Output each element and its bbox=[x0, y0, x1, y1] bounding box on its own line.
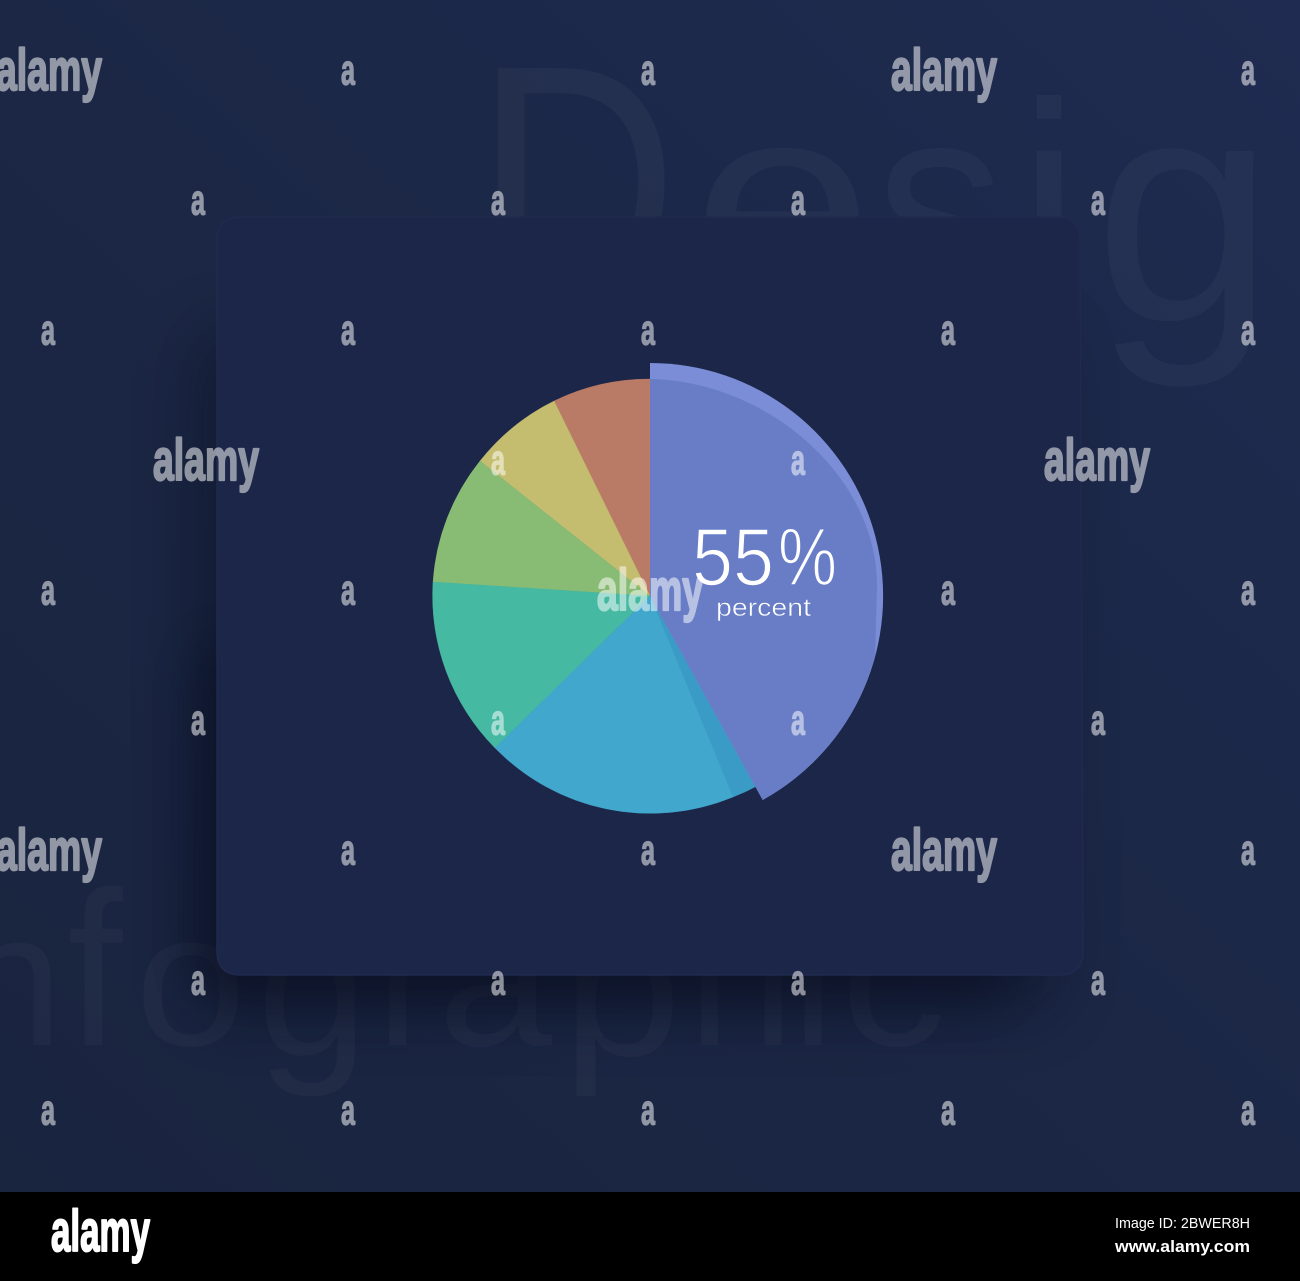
background word: Infographic: g bbox=[257, 875, 368, 1098]
watermark: repeated letter a: a bbox=[641, 46, 656, 94]
watermark: repeated letter a: a bbox=[341, 46, 356, 94]
watermark: repeated letter a: a bbox=[491, 436, 506, 484]
background word: Design: i bbox=[1018, 44, 1080, 360]
value: 55%: % bbox=[778, 512, 837, 603]
watermark: repeated letter a: a bbox=[1091, 696, 1106, 744]
watermark: repeated letter a: a bbox=[791, 696, 806, 744]
watermark: repeated letter a: a bbox=[1241, 566, 1256, 614]
background word: Infographic: o bbox=[135, 874, 246, 1086]
watermark: repeated letter a: a bbox=[41, 306, 56, 354]
watermark: repeated letter a: a bbox=[41, 1086, 56, 1134]
background word: Design: e bbox=[692, 44, 874, 360]
background word: Infographic: h bbox=[688, 859, 794, 1089]
watermark: repeated letter a: a bbox=[41, 566, 56, 614]
footer bar bbox=[0, 1192, 1300, 1281]
background word: Infographic: a bbox=[438, 873, 552, 1085]
background word: Design: s bbox=[875, 44, 1005, 360]
card shadow: lower part bbox=[222, 620, 1022, 970]
watermark: repeated letter a: a bbox=[941, 566, 956, 614]
label: percent: percent bbox=[716, 594, 811, 622]
slice: blue shadow strip bbox=[650, 596, 757, 797]
watermark: repeated letter a: a bbox=[191, 176, 206, 224]
watermark: repeated letter a: a bbox=[491, 696, 506, 744]
watermark: alamy words: alamy bbox=[891, 38, 997, 103]
background word: Infographic: c bbox=[841, 874, 946, 1086]
watermark: repeated letter a: a bbox=[491, 956, 506, 1004]
watermark: repeated letter a: a bbox=[791, 176, 806, 224]
watermark: repeated letter a: a bbox=[341, 826, 356, 874]
background word: Infographic: f bbox=[67, 846, 123, 1092]
watermark: repeated letter a: a bbox=[1241, 1086, 1256, 1134]
watermark: repeated letter a: a bbox=[791, 436, 806, 484]
background word: Infographic: i bbox=[792, 874, 834, 1086]
background word: Infographic bbox=[0, 846, 946, 1098]
watermark: repeated letter a: a bbox=[1241, 826, 1256, 874]
watermark: repeated letter a: a bbox=[1241, 46, 1256, 94]
watermark: alamy words: alamy bbox=[891, 818, 997, 883]
watermark: alamy words: alamy bbox=[153, 428, 259, 493]
watermark: repeated letter a: a bbox=[491, 176, 506, 224]
watermark: repeated letter a: a bbox=[341, 1086, 356, 1134]
watermark: repeated letter a: a bbox=[941, 306, 956, 354]
watermark: repeated letter a: a bbox=[641, 826, 656, 874]
pie chart bbox=[433, 363, 883, 813]
slice: green bbox=[433, 461, 650, 596]
watermark: repeated letter a: a bbox=[1091, 956, 1106, 1004]
value: 55%: 55 bbox=[692, 512, 774, 603]
watermark: repeated letter a: a bbox=[641, 1086, 656, 1134]
watermark: repeated letter a: a bbox=[1241, 306, 1256, 354]
watermark: repeated letter a: a bbox=[941, 1086, 956, 1134]
slice: blue bbox=[495, 596, 733, 813]
watermark: alamy words: alamy bbox=[597, 558, 703, 623]
background word: Infographic: r bbox=[376, 874, 439, 1086]
background word: Design bbox=[475, 0, 1300, 390]
background word: Design: g bbox=[1094, 31, 1275, 390]
background word: Infographic: p bbox=[562, 874, 682, 1097]
watermark: repeated letter a bbox=[41, 46, 1256, 1134]
card shadow bbox=[225, 300, 1075, 970]
watermark: repeated letter a: a bbox=[341, 566, 356, 614]
watermark: repeated letter a: a bbox=[191, 696, 206, 744]
watermark: alamy words: alamy bbox=[1044, 428, 1150, 493]
watermark: repeated letter a: a bbox=[791, 956, 806, 1004]
watermark: alamy words: alamy bbox=[0, 38, 102, 103]
watermark: repeated letter a: a bbox=[641, 306, 656, 354]
watermark: repeated letter a: a bbox=[1091, 176, 1106, 224]
slice: teal bbox=[433, 582, 650, 748]
footer: image id: Image ID: 2BWER8H bbox=[1115, 1215, 1250, 1232]
watermark: repeated letter a: a bbox=[341, 306, 356, 354]
highlighted slice: outer band bbox=[650, 363, 883, 800]
value: 55% bbox=[692, 512, 837, 603]
watermark: repeated letter a: a bbox=[191, 956, 206, 1004]
highlighted slice: main bbox=[650, 379, 877, 800]
panel: card bbox=[217, 217, 1083, 975]
footer logo: alamy: alamy bbox=[51, 1199, 150, 1264]
footer: website: www.alamy.com bbox=[1114, 1237, 1250, 1256]
slice: salmon bbox=[554, 379, 650, 596]
watermark: alamy words: alamy bbox=[0, 818, 102, 883]
watermark: alamy words bbox=[0, 38, 1150, 883]
background word: Design: D bbox=[475, 0, 678, 372]
slice: yellow bbox=[480, 401, 650, 596]
